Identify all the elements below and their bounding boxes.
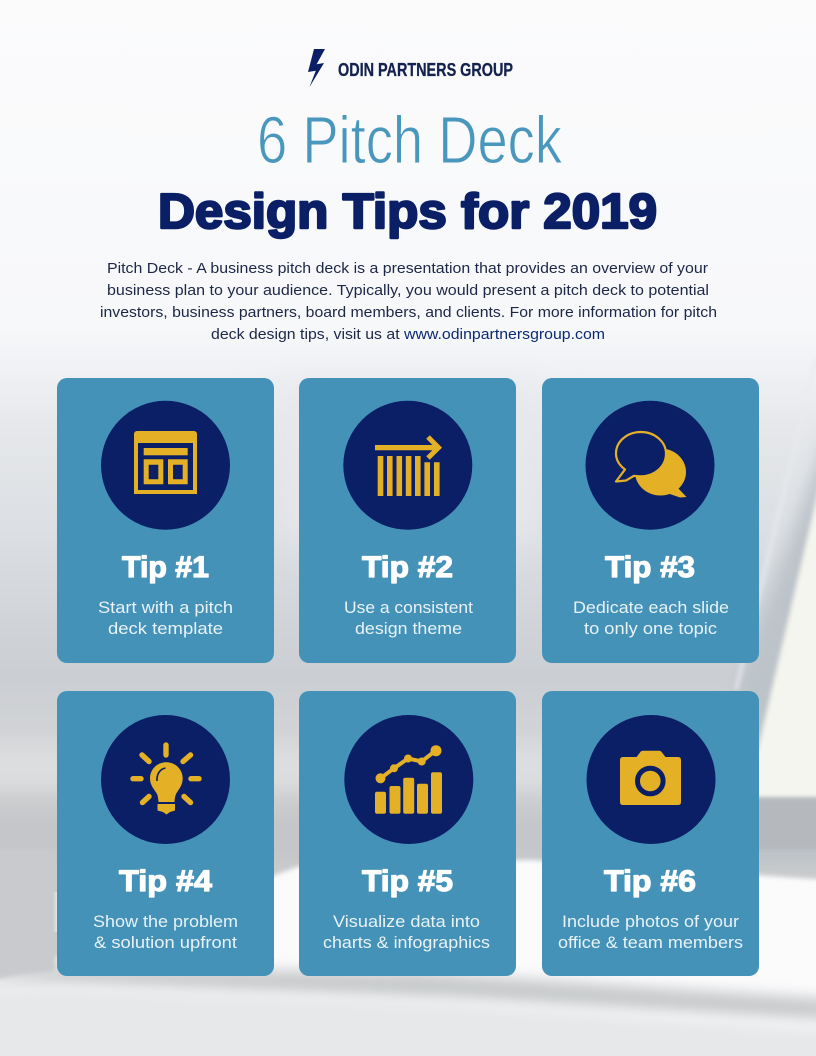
description: Start with a pitch — [98, 598, 233, 617]
description — [558, 912, 743, 952]
intro paragraph: deck design tips, visit us at www.odinpartnersgroup.com — [211, 326, 605, 343]
description: charts & infographics — [323, 933, 490, 952]
intro paragraph: business plan to your audience. Typically, you would present a pitch deck to potential — [107, 282, 709, 299]
description: Show the problem — [93, 912, 238, 931]
desk surface — [0, 860, 816, 1056]
description — [323, 912, 490, 952]
heading: Tip #4 — [119, 865, 212, 898]
description: & solution upfront — [94, 933, 237, 952]
logo wordmark: ODIN PARTNERS GROUP — [338, 60, 513, 80]
description: deck template — [108, 619, 223, 638]
icon: light bulb — [133, 745, 199, 814]
description — [98, 598, 233, 638]
title line 1: 6 Pitch Deck — [257, 103, 562, 178]
icon: lightning bolt — [308, 49, 325, 87]
panel: tip 3 — [542, 378, 759, 663]
title line 2: Design Tips for 2019 — [158, 185, 657, 239]
icon: speech bubbles — [616, 432, 686, 498]
icon: bars with arrow — [375, 437, 440, 496]
heading: Tip #6 — [604, 865, 696, 898]
description — [344, 598, 473, 638]
panel: tip 1 — [57, 378, 274, 663]
logo — [308, 49, 513, 87]
icon: camera — [620, 751, 681, 805]
icon: growth chart — [375, 745, 442, 814]
heading: Tip #1 — [122, 551, 209, 584]
intro paragraph — [100, 260, 717, 343]
description: office & team members — [558, 933, 743, 952]
description — [573, 598, 729, 638]
icon: layout template — [134, 431, 197, 494]
panel: tip 2 — [299, 378, 516, 663]
description: Dedicate each slide — [573, 598, 729, 617]
panel: tip 4 — [57, 691, 274, 976]
description: design theme — [355, 619, 462, 638]
description: Use a consistent — [344, 598, 473, 617]
description: to only one topic — [584, 619, 718, 638]
panel: tip 6 — [542, 691, 759, 976]
intro paragraph: Pitch Deck - A business pitch deck is a presentation that provides an overview of your — [107, 260, 708, 277]
description — [93, 912, 238, 952]
description: Visualize data into — [333, 912, 480, 931]
description: Include photos of your — [562, 912, 739, 931]
heading: Tip #3 — [605, 551, 695, 584]
panel: tip 5 — [299, 691, 516, 976]
heading: Tip #2 — [362, 551, 453, 584]
intro paragraph: investors, business partners, board members, and clients. For more information for pitch — [100, 304, 717, 321]
heading: Tip #5 — [362, 865, 453, 898]
laptop screen — [720, 400, 816, 860]
